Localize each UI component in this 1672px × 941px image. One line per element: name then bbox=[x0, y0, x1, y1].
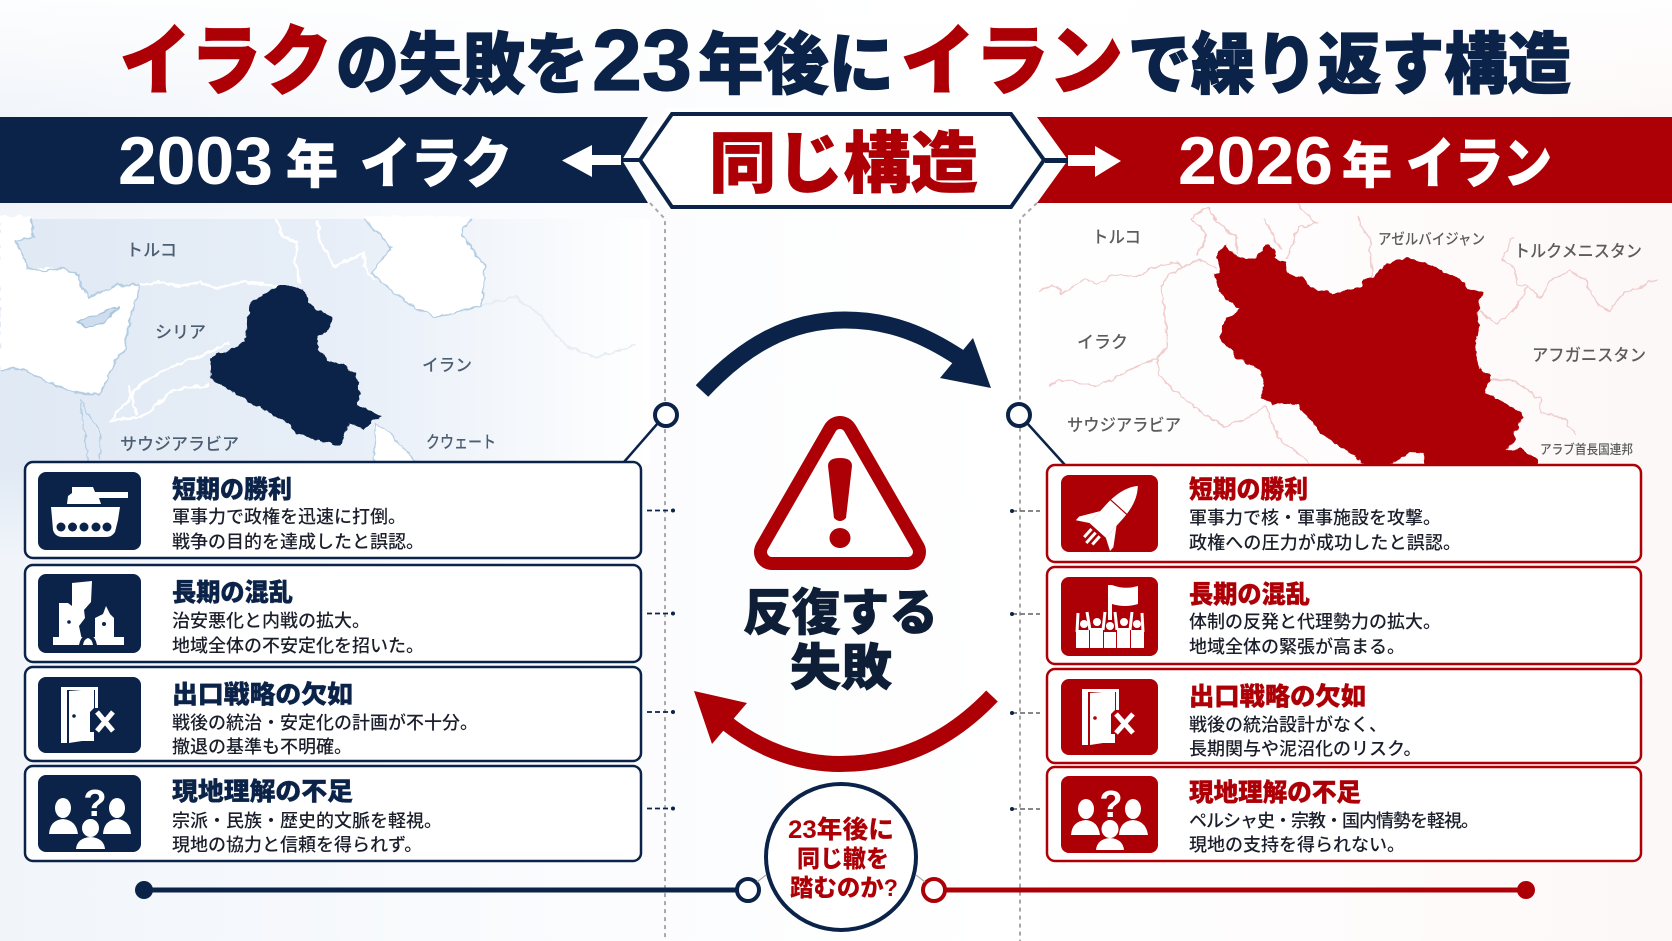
banner: 2003 Iraq: 年 bbox=[286, 137, 338, 195]
card: 出口戦略の欠如 (Iran): 戦後の統治設計がなく、 bbox=[1189, 714, 1387, 735]
icon: door with X bbox=[1061, 679, 1158, 755]
card: 長期の混乱 (Iraq) bbox=[25, 565, 641, 662]
map: Middle East around Iran bbox=[1040, 205, 1657, 463]
connector: left ring to card bbox=[624, 404, 677, 462]
white gap around centre badge bbox=[632, 108, 1052, 210]
circle callout: 23年後に同じ轍を踏むのか?: 同じ轍を bbox=[797, 846, 889, 873]
card: 出口戦略の欠如 (Iraq): 撤退の基準も不明確。 bbox=[172, 737, 352, 757]
icon: people with question mark: ? bbox=[1099, 784, 1123, 826]
card: 現地理解の不足 (Iran) bbox=[1047, 767, 1641, 861]
card: 長期の混乱 (Iran): 地域全体の緊張が高まる。 bbox=[1189, 636, 1405, 657]
map label: アゼルバイジャン: アゼルバイジャン bbox=[1378, 231, 1485, 248]
circle callout: 23年後に同じ轍を踏むのか?: 23年後に bbox=[788, 815, 894, 844]
card: 出口戦略の欠如 (Iraq): 出口戦略の欠如 bbox=[172, 680, 353, 709]
icon: people with question mark bbox=[1061, 776, 1158, 853]
circle callout: 23年後に同じ轍を踏むのか?: 踏むのか? bbox=[790, 875, 898, 902]
card: 現地理解の不足 (Iraq) bbox=[25, 766, 641, 861]
card: 出口戦略の欠如 (Iraq) bbox=[25, 667, 641, 761]
map: Middle East around Iraq bbox=[0, 216, 650, 560]
icon: rocket bbox=[1061, 470, 1158, 558]
arrow: to the left banner bbox=[562, 145, 640, 177]
card: 出口戦略の欠如 (Iran): 長期関与や泥沼化のリスク。 bbox=[1189, 739, 1422, 759]
card: 出口戦略の欠如 (Iran) bbox=[1047, 669, 1641, 763]
banner: 2026 Iran: 年 bbox=[1342, 138, 1392, 194]
card: 現地理解の不足 (Iraq): 現地の協力と信頼を得られず。 bbox=[172, 835, 422, 855]
centre badge: 同じ構造: 同じ構造 bbox=[709, 127, 978, 202]
title: 年後に bbox=[698, 28, 894, 103]
card: 現地理解の不足 (Iran): 現地理解の不足 bbox=[1189, 779, 1361, 807]
icon: people with question mark bbox=[38, 775, 141, 852]
title: イラク bbox=[120, 20, 332, 105]
card: 短期の勝利 (Iraq): 軍事力で政権を迅速に打倒。 bbox=[172, 507, 406, 527]
warning triangle icon bbox=[772, 434, 908, 552]
panel: Iran failures bbox=[1047, 465, 1641, 861]
card: 出口戦略の欠如 (Iraq): 戦後の統治・安定化の計画が不十分。 bbox=[172, 712, 478, 733]
card: 短期の勝利 (Iran): 短期の勝利 bbox=[1189, 476, 1308, 504]
banner: 2026 Iran: 2026 bbox=[1178, 123, 1333, 199]
card: 現地理解の不足 (Iran): 現地の支持を得られない。 bbox=[1189, 835, 1405, 855]
timeline: red bbox=[923, 879, 1535, 901]
card: 短期の勝利 (Iran): 軍事力で核・軍事施設を攻撃。 bbox=[1189, 508, 1441, 528]
map label: トルコ: トルコ bbox=[1092, 228, 1141, 247]
centre label: 反復する失敗 bbox=[743, 585, 938, 696]
card: 短期の勝利 (Iraq): 戦争の目的を達成したと誤認。 bbox=[172, 532, 424, 552]
title: 23 bbox=[592, 13, 692, 109]
icon: door with X bbox=[38, 677, 141, 753]
map: Iraq silhouette bbox=[210, 285, 382, 446]
icon: ruined buildings bbox=[38, 574, 141, 653]
map label: サウジアラビア: サウジアラビア bbox=[120, 435, 239, 454]
card: 出口戦略の欠如 (Iran): 出口戦略の欠如 bbox=[1189, 682, 1366, 711]
card: 長期の混乱 (Iran): 長期の混乱 bbox=[1189, 581, 1310, 609]
map label: トルコ: トルコ bbox=[126, 241, 177, 260]
icon: tank bbox=[38, 472, 141, 550]
title: で繰り返す構造 bbox=[1128, 28, 1571, 103]
connector: right ring to card bbox=[1008, 404, 1065, 465]
banner: 2003 Iraq: 2003 bbox=[118, 123, 273, 199]
card: 短期の勝利 (Iraq) bbox=[25, 462, 641, 558]
banner: 2026 Iran: イラン bbox=[1406, 133, 1552, 195]
card: 現地理解の不足 (Iran): ペルシャ史・宗教・国内情勢を軽視。 bbox=[1189, 811, 1479, 831]
centre label: 反復する失敗: 反復する bbox=[743, 585, 938, 641]
card: 現地理解の不足 (Iraq): 現地理解の不足 bbox=[172, 778, 353, 806]
circle callout: 23年後に同じ轍を踏むのか? bbox=[766, 784, 916, 930]
card: 短期の勝利 (Iran): 政権への圧力が成功したと誤認。 bbox=[1189, 532, 1461, 553]
card: 現地理解の不足 (Iraq): 宗派・民族・歴史的文脈を軽視。 bbox=[172, 811, 442, 831]
map label: アフガニスタン: アフガニスタン bbox=[1532, 346, 1646, 365]
panel: Iraq failures bbox=[25, 462, 641, 861]
banner: 2026 Iran bbox=[1037, 117, 1672, 203]
card: 長期の混乱 (Iraq): 地域全体の不安定化を招いた。 bbox=[172, 636, 424, 656]
dash connectors: right bbox=[1010, 509, 1040, 811]
dotted guide lines bbox=[650, 203, 1037, 941]
icon: crowd with flag bbox=[1061, 577, 1158, 656]
card: 長期の混乱 (Iran): 体制の反発と代理勢力の拡大。 bbox=[1189, 612, 1441, 632]
map label: アラブ首長国連邦: アラブ首長国連邦 bbox=[1540, 442, 1633, 457]
card: 長期の混乱 (Iraq): 治安悪化と内戦の拡大。 bbox=[172, 611, 370, 631]
map label: サウジアラビア: サウジアラビア bbox=[1067, 416, 1181, 435]
map: Iran silhouette bbox=[1214, 244, 1538, 475]
title: イラン bbox=[901, 20, 1123, 105]
map label: イラク: イラク bbox=[1077, 333, 1128, 352]
centre badge: 同じ構造 bbox=[640, 114, 1044, 207]
banner: 2003 Iraq bbox=[0, 117, 648, 203]
icon: people with question mark: ? bbox=[83, 783, 107, 825]
map label: クウェート: クウェート bbox=[426, 433, 496, 452]
map label: イラン: イラン bbox=[422, 356, 472, 375]
dash connectors: left bbox=[647, 508, 675, 810]
cycle arrow: red, bottom bbox=[694, 691, 992, 764]
card: 長期の混乱 (Iran) bbox=[1047, 567, 1641, 664]
title bbox=[120, 13, 1571, 109]
arrow: to the right banner bbox=[1045, 146, 1121, 177]
title: の失敗を bbox=[336, 28, 588, 103]
map label: トルクメニスタン: トルクメニスタン bbox=[1514, 242, 1642, 261]
timeline: navy bbox=[135, 879, 759, 901]
card: 長期の混乱 (Iraq): 長期の混乱 bbox=[172, 579, 293, 607]
card: 短期の勝利 (Iran) bbox=[1047, 465, 1641, 562]
map label: シリア: シリア bbox=[155, 323, 206, 342]
banner: 2003 Iraq: イラク bbox=[360, 133, 512, 195]
centre label: 反復する失敗: 失敗 bbox=[790, 640, 892, 696]
cycle arrow: navy, top bbox=[702, 320, 991, 391]
card: 短期の勝利 (Iraq): 短期の勝利 bbox=[172, 476, 292, 504]
